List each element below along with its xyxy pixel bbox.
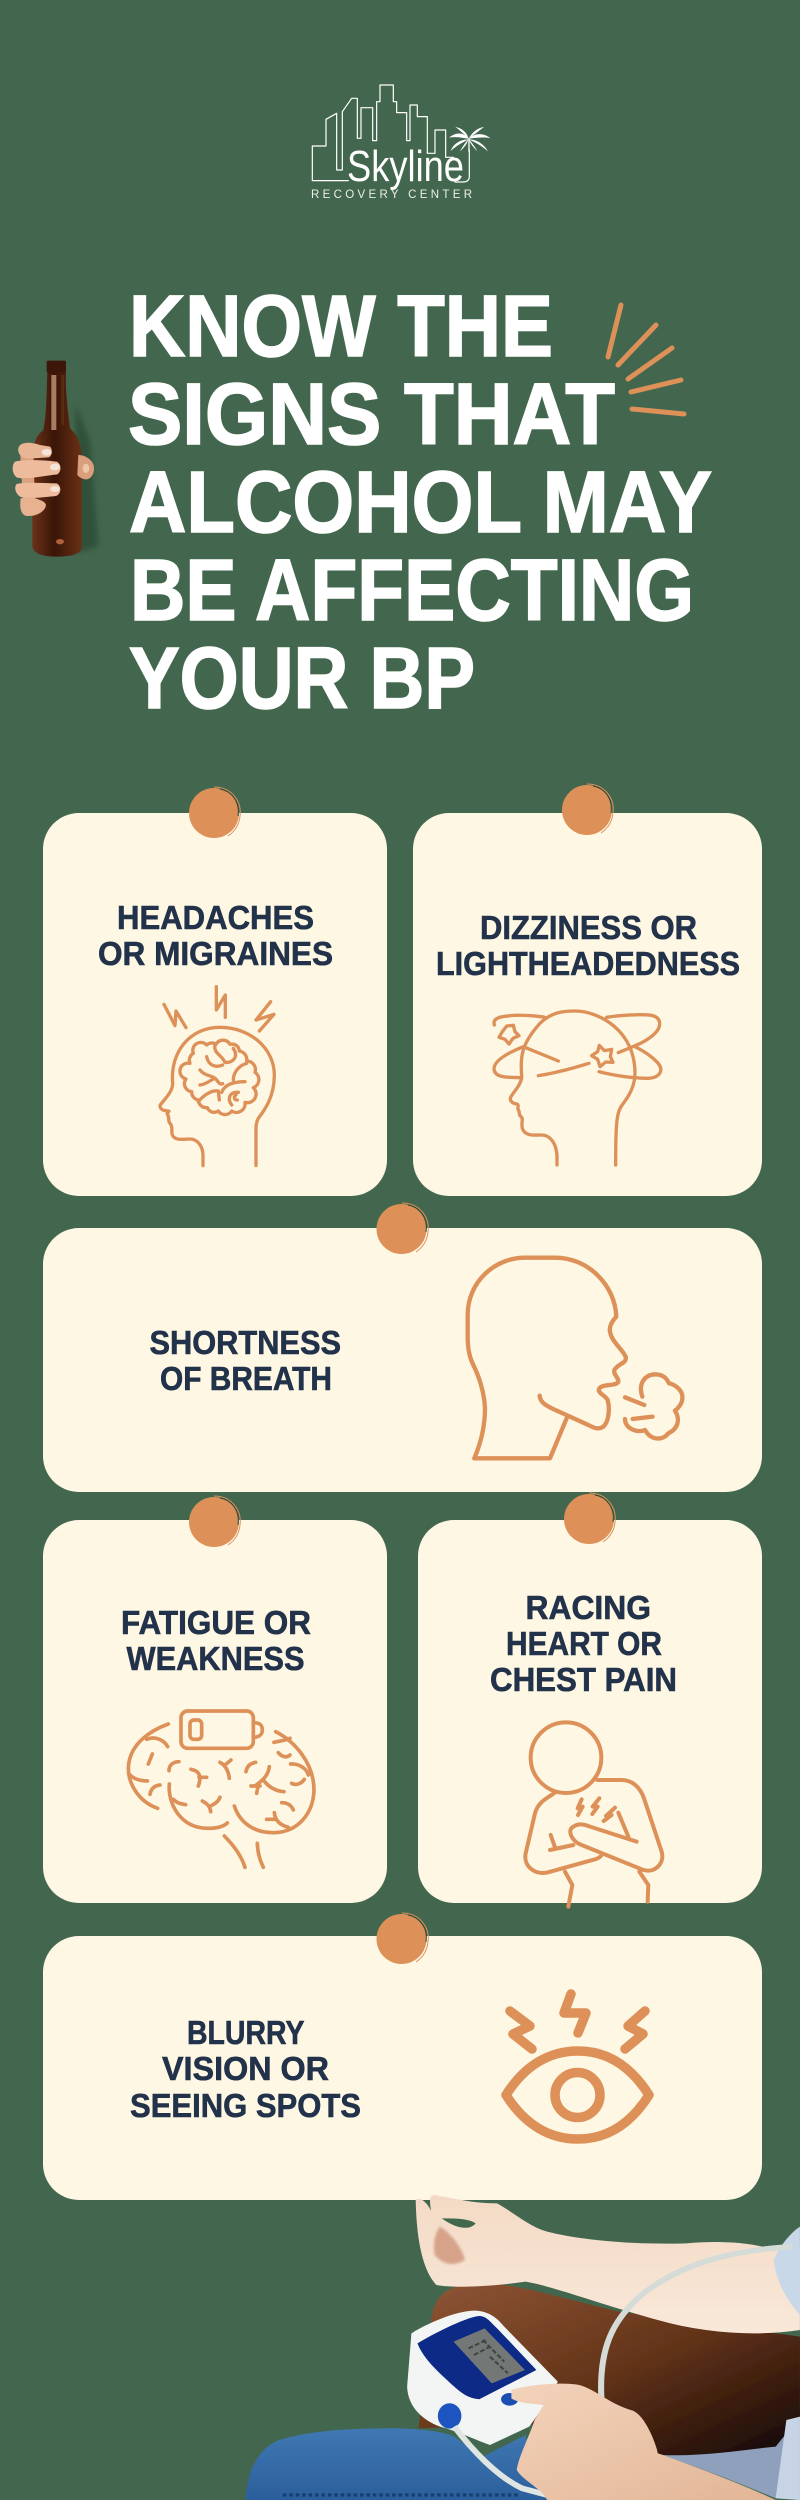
gap between fingers (442, 2218, 476, 2228)
card background (43, 813, 387, 1196)
heading: FATIGUE OR (121, 1605, 311, 1642)
monitor button (501, 2393, 518, 2406)
heading: OF BREATH (160, 1361, 332, 1398)
icon: eye with lightning (506, 1994, 649, 2139)
title: SIGNS THAT (128, 366, 615, 463)
shirt sleeve (774, 2227, 800, 2315)
blood pressure monitor (407, 2311, 558, 2445)
illustration: hand holding beer bottle (13, 361, 98, 557)
bottle (32, 362, 82, 557)
heading (436, 910, 740, 983)
lower hand (511, 2384, 776, 2500)
photo illustration: person measuring blood pressure (245, 2195, 800, 2500)
hose connector (438, 2403, 461, 2429)
bottle shadow (75, 403, 98, 553)
title: ALCOHOL MAY (129, 454, 712, 551)
card background (43, 1520, 387, 1903)
icon: head with brain and lightning (160, 987, 274, 1166)
logo: Skyline Recovery Center (311, 85, 491, 201)
pin (376, 1913, 428, 1964)
panel: headaches or migraines (43, 787, 387, 1196)
raised arm and hand (416, 2195, 800, 2333)
icon: orange emphasis burst (608, 305, 684, 414)
panel: dizziness or lightheadedness (413, 784, 762, 1196)
card background (43, 1228, 762, 1492)
heading: CHEST PAIN (490, 1662, 677, 1699)
card background (418, 1520, 762, 1903)
icon: palm tree (449, 127, 491, 152)
card background (413, 813, 762, 1196)
card background (43, 1936, 762, 2200)
panel: fatigue or weakness (43, 1496, 387, 1903)
LCD screen (454, 2328, 525, 2383)
title: KNOW THE (129, 278, 553, 375)
title (128, 278, 712, 727)
pin (189, 787, 240, 838)
heading (130, 2015, 361, 2125)
heading: WEAKNESS (126, 1641, 304, 1678)
icon: person holding chest (525, 1722, 662, 1907)
icon: brain with low battery (128, 1711, 314, 1867)
panel: racing heart or chest pain (418, 1493, 762, 1907)
title: YOUR BP (129, 630, 475, 727)
title: BE AFFECTING (130, 542, 694, 639)
heading (121, 1605, 311, 1678)
jeans (245, 2428, 547, 2500)
heading: OR MIGRAINES (98, 936, 333, 973)
monitor panel (417, 2316, 536, 2399)
logo subtitle: RECOVERY CENTER (311, 189, 472, 201)
heading: SHORTNESS (150, 1325, 341, 1362)
heading (98, 900, 333, 973)
heading: BLURRY (187, 2015, 304, 2052)
panel: shortness of breath (43, 1203, 762, 1492)
pin (562, 784, 613, 835)
cuff tube (601, 2247, 792, 2398)
heading (490, 1590, 677, 1699)
panel: blurry vision or seeing spots (43, 1913, 762, 2200)
cushion (419, 2283, 800, 2460)
icon: dizzy head with orbiting stars (494, 1011, 661, 1165)
pin (189, 1496, 240, 1547)
heading (150, 1325, 341, 1398)
heading: LIGHTHEADEDNESS (436, 946, 740, 983)
shirt (661, 2417, 800, 2500)
pin (376, 1203, 428, 1254)
heading: VISION OR (162, 2051, 329, 2088)
thumb and fingers (77, 455, 94, 479)
heading: DIZZINESS OR (480, 910, 697, 947)
hose (454, 2427, 547, 2495)
icon: head exhaling breath (468, 1258, 682, 1458)
heading: RACING (526, 1590, 651, 1627)
heading: SEEING SPOTS (130, 2088, 361, 2125)
heading: HEADACHES (117, 900, 314, 937)
palm shadow (434, 2227, 465, 2264)
icon: city skyline outline (312, 85, 469, 182)
logo wordmark: Skyline (347, 142, 464, 191)
heading: HEART OR (506, 1626, 662, 1663)
pin (564, 1493, 615, 1544)
